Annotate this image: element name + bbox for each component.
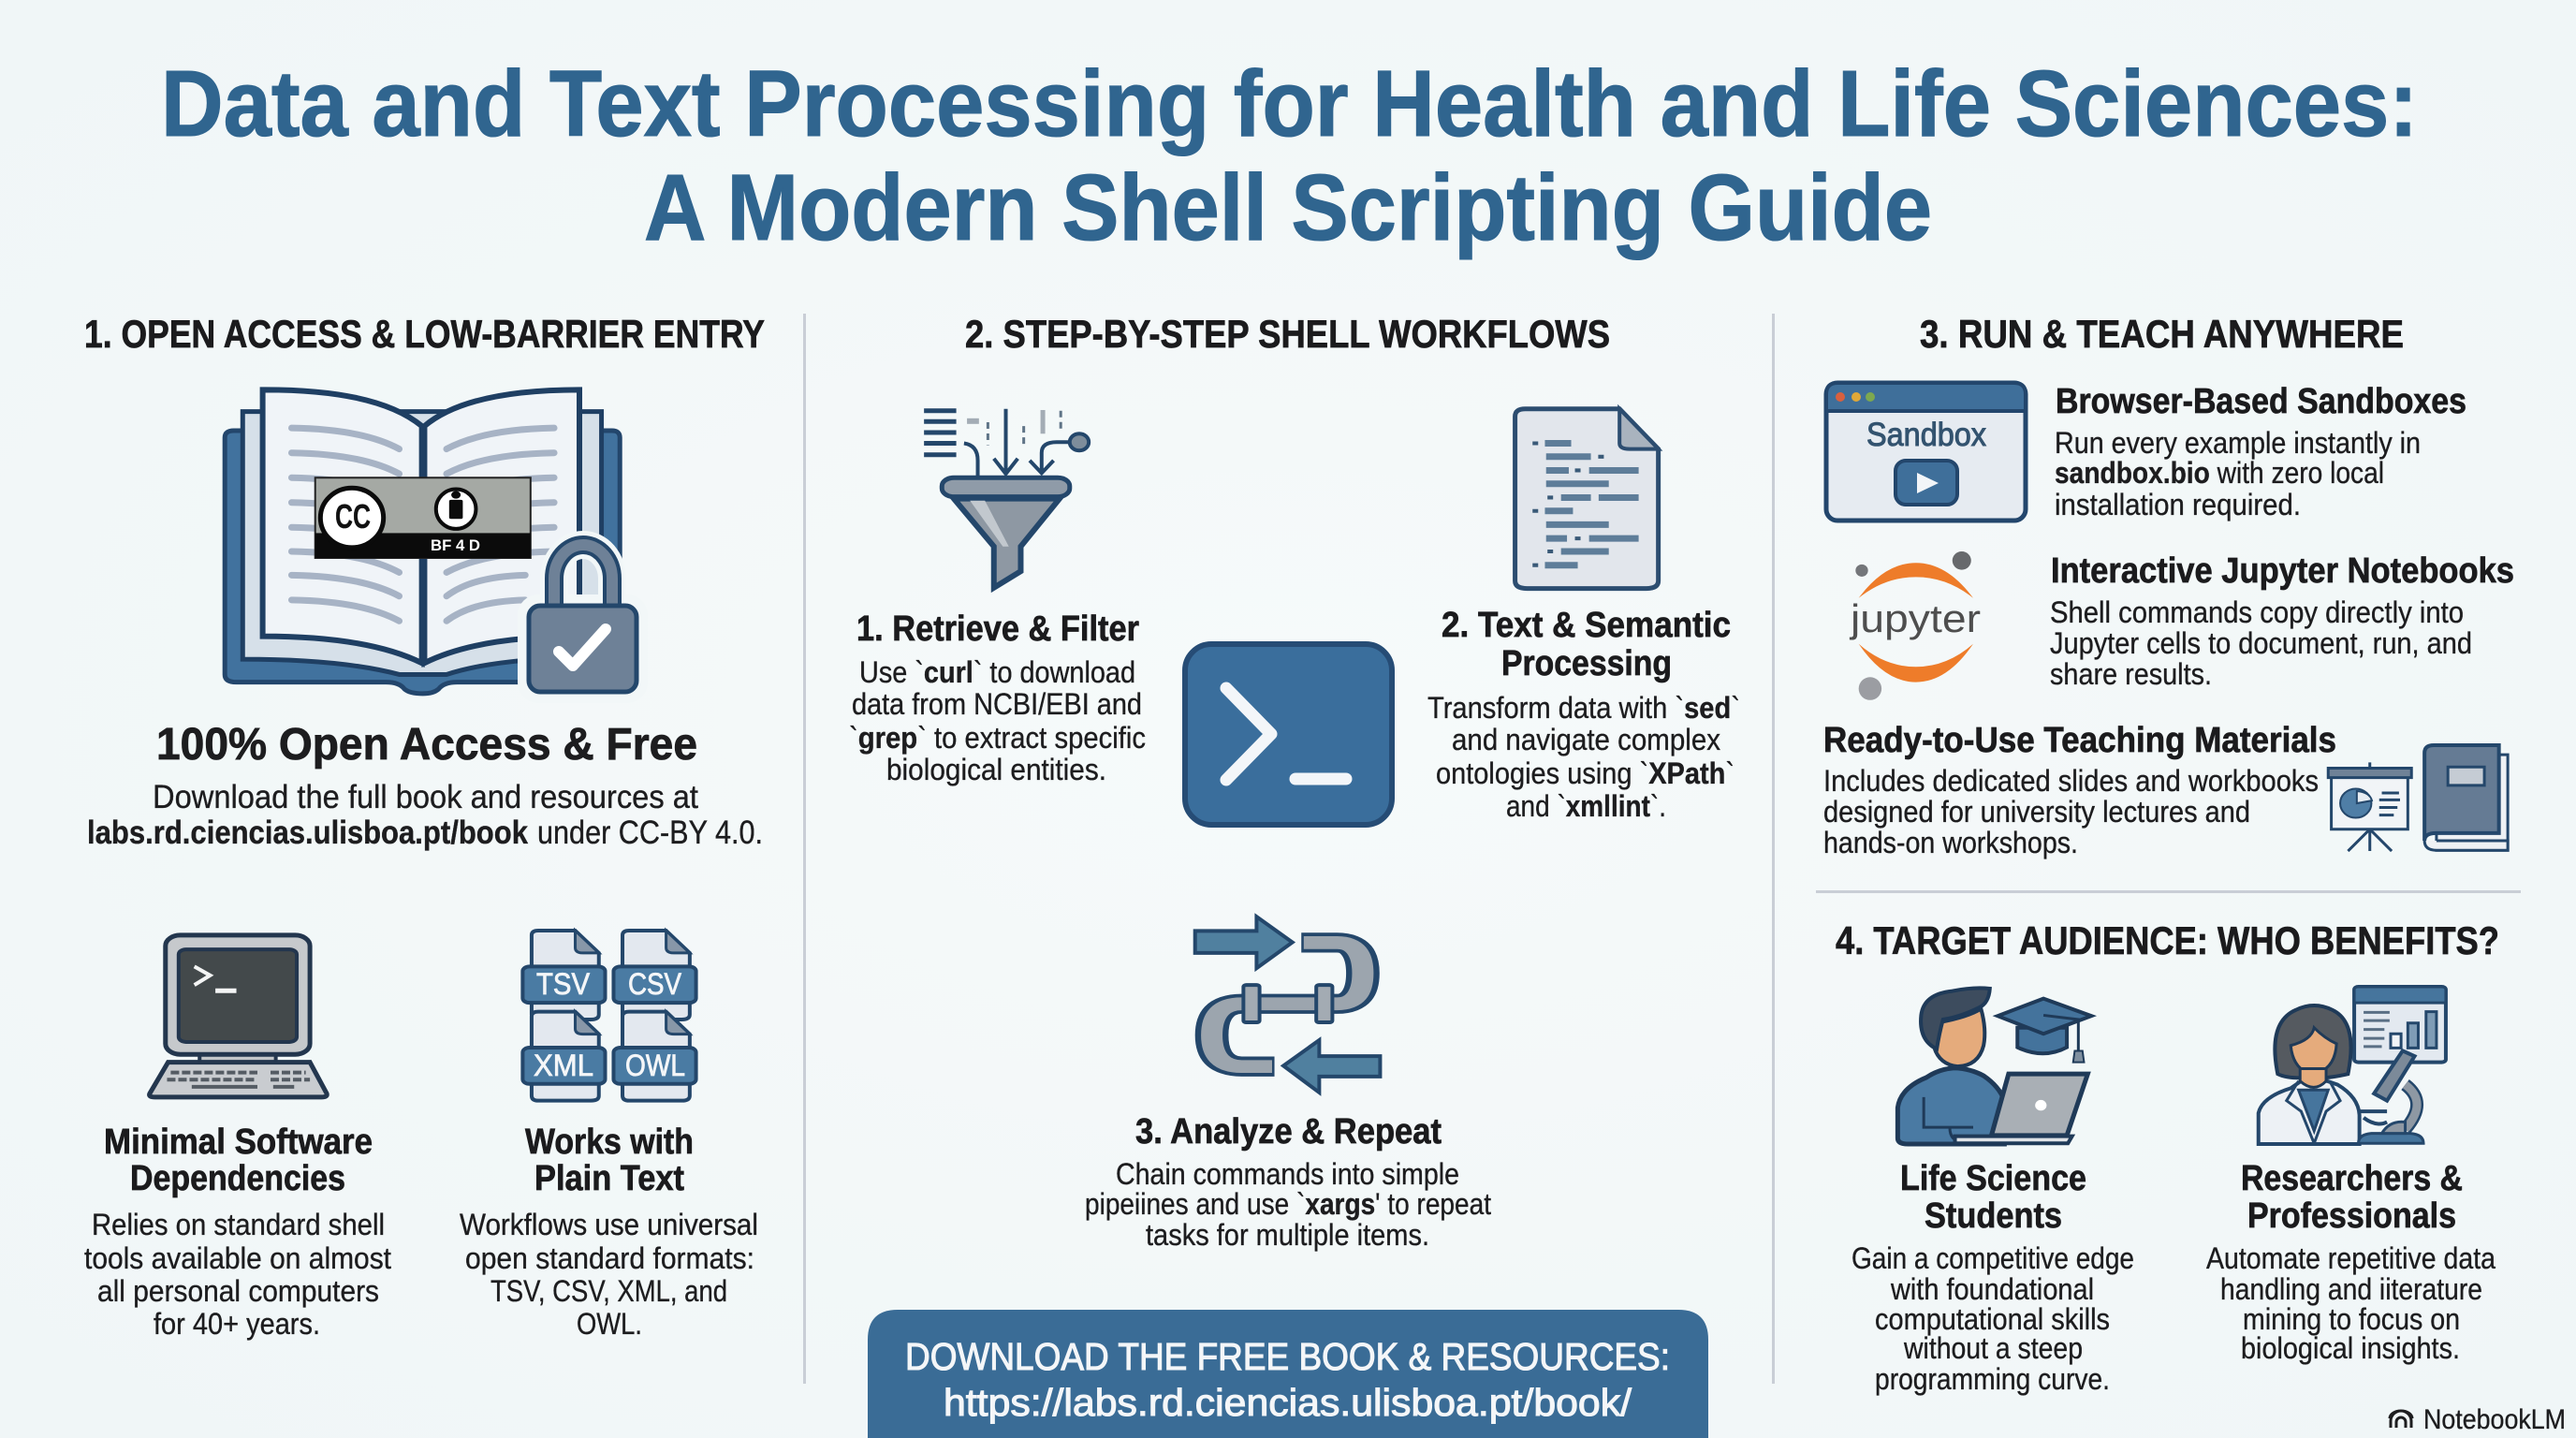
text block: retrieve and filter: 1. Retrieve & Filter xyxy=(856,609,1139,649)
callout: download banner xyxy=(868,1310,1708,1438)
text block: minimal software dependencies: tools available on almost xyxy=(84,1241,391,1275)
heading: section 2: 2. STEP-BY-STEP SHELL WORKFLOWS xyxy=(965,312,1610,356)
text block: text and semantic processing: and navigate complex xyxy=(1452,723,1720,756)
text block: retrieve and filter: biological entities. xyxy=(886,753,1106,786)
title: Data and Text Processing for Health and Life Sciences: xyxy=(161,51,2418,156)
text block: browser-based sandboxes: installation required. xyxy=(2055,488,2301,521)
icon: central terminal prompt xyxy=(1185,644,1392,825)
panel: open access and low-barrier entry xyxy=(84,312,765,1341)
text block: analyze and repeat xyxy=(1085,1112,1491,1252)
text block: life science students: Gain a competitive edge xyxy=(1852,1241,2134,1275)
text block: life science students: Life Science xyxy=(1900,1159,2086,1198)
icon: browser sandbox window xyxy=(1826,383,2026,521)
panel: step-by-step shell workflows xyxy=(849,312,1740,1438)
icon: plain text file formats: TSV xyxy=(536,967,591,1001)
icon: presentation board xyxy=(2328,762,2411,851)
text block: minimal software dependencies: for 40+ years. xyxy=(154,1307,320,1341)
text block: works with plain text xyxy=(460,1123,758,1341)
text block: interactive jupyter notebooks: Shell commands copy directly into xyxy=(2050,595,2464,629)
icon: browser sandbox window: Sandbox xyxy=(1866,417,1986,453)
panel: run and teach anywhere xyxy=(1823,312,2514,859)
text block: life science students xyxy=(1852,1159,2134,1396)
text block: interactive jupyter notebooks: share results. xyxy=(2050,657,2212,691)
text block: researchers and professionals: mining to focus on xyxy=(2243,1302,2460,1336)
callout: download banner: https://labs.rd.ciencias.ulisboa.pt/book/ xyxy=(944,1381,1632,1424)
text block: researchers and professionals xyxy=(2206,1159,2496,1365)
text block: life science students: programming curve. xyxy=(1875,1362,2110,1396)
text block: works with plain text: Workflows use universal xyxy=(460,1208,758,1241)
icon: plain text file formats xyxy=(522,931,696,1101)
text block: life science students: Students xyxy=(1925,1196,2062,1236)
text block: interactive jupyter notebooks: Jupyter cells to document, run, and xyxy=(2050,626,2472,660)
heading: section 3: 3. RUN & TEACH ANYWHERE xyxy=(1920,312,2404,356)
text block: works with plain text: Works with xyxy=(525,1123,694,1162)
text block: works with plain text: Plain Text xyxy=(534,1159,684,1198)
icon: document with code lines xyxy=(1515,409,1659,589)
text block: browser-based sandboxes xyxy=(2055,382,2466,521)
icon: open book with CC badge and padlock: BF 4 D xyxy=(431,536,480,554)
text block: retrieve and filter: Use `curl` to download xyxy=(859,655,1135,689)
text block: text and semantic processing: 2. Text & Semantic xyxy=(1442,606,1731,645)
text block: researchers and professionals: Professionals xyxy=(2247,1196,2456,1236)
text block: ready-to-use teaching materials: hands-on workshops. xyxy=(1823,826,2078,859)
text block: interactive jupyter notebooks xyxy=(2050,551,2514,691)
text block: retrieve and filter: data from NCBI/EBI and xyxy=(852,687,1142,721)
text block: browser-based sandboxes: sandbox.bio with zero local xyxy=(2055,456,2384,490)
text block: ready-to-use teaching materials: Ready-to-Use Teaching Materials xyxy=(1823,721,2336,760)
text block: works with plain text: OWL. xyxy=(577,1307,642,1341)
panel: target audience xyxy=(1836,918,2499,1396)
text block: life science students: computational skills xyxy=(1875,1302,2110,1336)
text block: interactive jupyter notebooks: Interactive Jupyter Notebooks xyxy=(2051,551,2514,591)
icon: plain text file formats: OWL xyxy=(625,1049,685,1082)
text block: minimal software dependencies: Relies on standard shell xyxy=(92,1208,385,1241)
heading: section 1: 1. OPEN ACCESS & LOW-BARRIER ENTRY xyxy=(84,312,765,356)
text block: analyze and repeat: tasks for multiple items. xyxy=(1146,1218,1429,1252)
text block: ready-to-use teaching materials xyxy=(1823,721,2336,859)
text block: text and semantic processing: Transform data with `sed` xyxy=(1427,691,1740,725)
icon: open book with CC badge and padlock xyxy=(225,389,638,694)
text block: analyze and repeat: pipeiines and use `xargs' to repeat xyxy=(1085,1187,1491,1221)
icon: plain text file formats: XML xyxy=(534,1049,593,1082)
text block: text and semantic processing: ontologies using `XPath` xyxy=(1436,756,1734,790)
text block: ready-to-use teaching materials: Includes dedicated slides and workbooks xyxy=(1823,764,2319,798)
text block: minimal software dependencies: all personal computers xyxy=(97,1274,379,1308)
text block: open access: labs.rd.ciencias.ulisboa.pt/book xyxy=(87,814,528,851)
title: A Modern Shell Scripting Guide xyxy=(644,155,1932,260)
text block: life science students: with foundational xyxy=(1890,1272,2094,1306)
text block: open access xyxy=(87,720,763,851)
text block: researchers and professionals: Automate repetitive data xyxy=(2206,1241,2496,1275)
text block: open access: under CC-BY 4.0. xyxy=(537,814,763,851)
icon: filter funnel xyxy=(924,409,1089,588)
icon: open book with CC badge and padlock: CC xyxy=(335,497,371,536)
text block: researchers and professionals: handling and iiterature xyxy=(2220,1272,2482,1306)
text block: open access: Download the full book and resources at xyxy=(153,779,698,815)
text block: retrieve and filter xyxy=(849,609,1146,786)
icon: jupyter logo: jupyter xyxy=(1849,596,1981,640)
text block: minimal software dependencies: Minimal Software xyxy=(104,1123,373,1162)
text block: researchers and professionals: Researchers & xyxy=(2241,1159,2463,1198)
callout: download banner: DOWNLOAD THE FREE BOOK & RESOURCES: xyxy=(905,1335,1670,1378)
icon: pipeline with arrows xyxy=(1195,917,1380,1093)
text block: ready-to-use teaching materials: designed for university lectures and xyxy=(1823,795,2250,829)
text block: analyze and repeat: 3. Analyze & Repeat xyxy=(1135,1112,1442,1152)
text block: browser-based sandboxes: Browser-Based Sandboxes xyxy=(2056,382,2466,421)
text block: text and semantic processing: Processing xyxy=(1501,644,1672,683)
icon: jupyter logo xyxy=(1849,551,1981,700)
text block: text and semantic processing: and `xmllint`. xyxy=(1506,789,1666,823)
icon: workbook xyxy=(2424,745,2508,850)
text block: analyze and repeat: Chain commands into simple xyxy=(1116,1157,1459,1191)
text block: open access: 100% Open Access & Free xyxy=(156,720,697,770)
icon: terminal computer xyxy=(150,935,327,1097)
text block: browser-based sandboxes: Run every example instantly in xyxy=(2055,426,2421,460)
text block: life science students: without a steep xyxy=(1903,1331,2083,1365)
icon: student with laptop and graduation cap xyxy=(1897,988,2091,1144)
text block: minimal software dependencies xyxy=(84,1123,391,1341)
title xyxy=(161,51,2418,260)
text block: minimal software dependencies: Dependencies xyxy=(130,1159,345,1198)
text block: works with plain text: TSV, CSV, XML, and xyxy=(490,1274,727,1308)
icon: researcher with microscope and chart xyxy=(2259,987,2446,1144)
text block: works with plain text: open standard formats: xyxy=(465,1241,754,1275)
icon: plain text file formats: CSV xyxy=(628,967,682,1001)
text block: text and semantic processing xyxy=(1427,606,1740,823)
text block: researchers and professionals: biological insights. xyxy=(2241,1331,2460,1365)
text block: retrieve and filter: `grep` to extract specific xyxy=(849,721,1146,755)
